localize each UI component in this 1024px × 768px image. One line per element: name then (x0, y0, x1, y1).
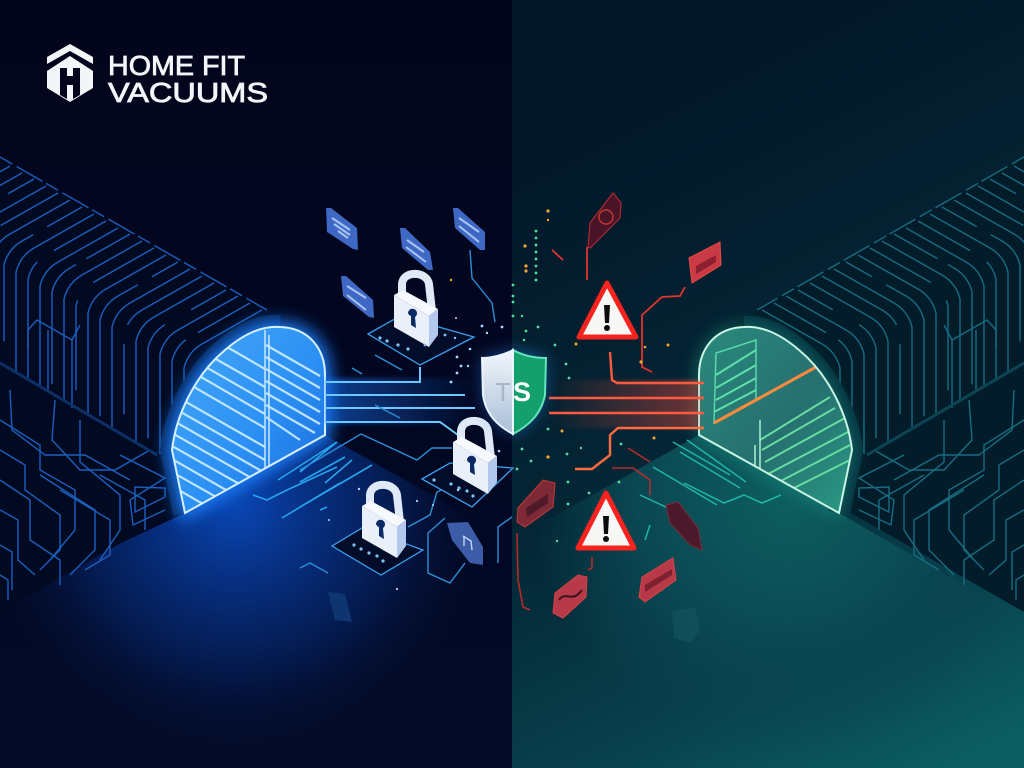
red stream glow (549, 380, 699, 428)
dark red hexagon (666, 502, 702, 550)
hexagon document icon (447, 522, 483, 565)
left arch glow (172, 327, 325, 513)
shield right half (513, 350, 546, 434)
left arch rim (172, 327, 280, 513)
red card bottom right (639, 558, 676, 602)
red card bottom (553, 575, 587, 618)
dark red shield (588, 193, 621, 248)
green data dots (512, 230, 622, 542)
lock icon 3 (362, 485, 406, 558)
plate 1 (368, 316, 474, 365)
left arch outline (172, 327, 325, 513)
left floor glow (0, 435, 512, 768)
blue stream lines (325, 367, 475, 435)
red threat streams (517, 247, 781, 610)
red lower trace (575, 428, 704, 469)
teal floor traces (640, 440, 781, 540)
pale blue dots (328, 317, 503, 590)
shield letter T: T (495, 377, 511, 407)
right ridge (867, 363, 1024, 455)
logo (47, 44, 268, 108)
right tunnel (699, 157, 1024, 612)
red card top right (689, 242, 721, 283)
dim red traces (552, 247, 685, 372)
plate 3 (332, 528, 423, 575)
brand name: HOME FIT (108, 50, 245, 81)
lock plates (332, 316, 513, 575)
right arch fill (699, 327, 852, 513)
right background (512, 0, 1024, 768)
lock icon 1 (394, 274, 438, 347)
logo icon (47, 44, 93, 102)
document icon 1 (326, 208, 358, 250)
right arch stripes (714, 340, 850, 492)
warning triangle 1 (579, 283, 636, 337)
lock icon 2 (453, 421, 497, 494)
left tunnel (0, 157, 325, 612)
left arch fill (172, 327, 325, 513)
right tunnel traces (757, 157, 1024, 600)
warning triangle 2 (578, 493, 634, 548)
left tunnel body (0, 157, 325, 612)
shield badge (482, 350, 546, 434)
right arch rim (744, 327, 852, 513)
blue stream glow (325, 378, 475, 424)
right floor glow (512, 435, 1024, 768)
red stream lines (549, 352, 704, 413)
blue document icons (326, 208, 485, 622)
left ridge (0, 363, 157, 455)
dim icon (328, 592, 352, 622)
plate 2 (422, 463, 513, 507)
blue circuit traces (300, 250, 512, 583)
right tunnel body (699, 157, 1024, 612)
brand name (108, 50, 268, 108)
shield glow (482, 350, 546, 434)
left background (0, 0, 512, 768)
right arch outline (699, 327, 852, 513)
right arch glow (699, 327, 852, 513)
red card left (517, 480, 555, 527)
left tunnel traces (0, 157, 267, 600)
left arch stripes (165, 330, 320, 508)
dim hexagon (672, 607, 700, 643)
red threat icons (517, 193, 721, 643)
document icon 4 (341, 276, 374, 318)
dark red traces (517, 448, 650, 610)
document icon 2 (400, 228, 433, 270)
document icon 3 (453, 208, 485, 250)
lock plate dots (352, 334, 475, 563)
particles (328, 209, 670, 590)
brand name: VACUUMS (108, 77, 268, 108)
blue data streams (253, 250, 512, 583)
shield left half (482, 350, 513, 434)
orange and yellow dots (450, 209, 670, 459)
blue floor traces (253, 442, 372, 518)
shield letter S: S (513, 377, 531, 407)
